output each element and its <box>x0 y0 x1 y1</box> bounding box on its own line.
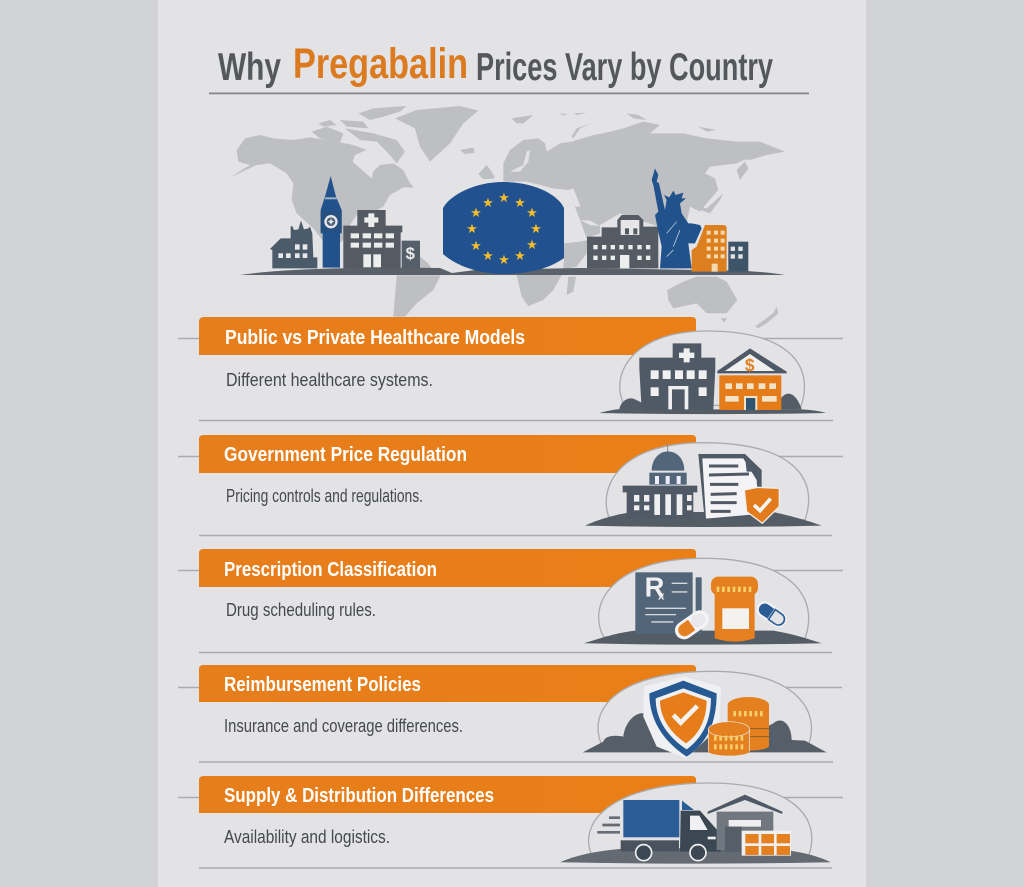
icon: EU flag: ★ <box>498 190 510 205</box>
section 3: prescription classification <box>199 549 822 645</box>
icon: government building <box>587 215 658 268</box>
description: Insurance and coverage differences. <box>224 716 463 736</box>
icon: truck and warehouse <box>560 783 831 864</box>
icon: church <box>270 221 317 268</box>
world map <box>230 106 785 328</box>
icon: hospital <box>343 210 402 268</box>
icon: EU flag: ★ <box>482 248 494 263</box>
section 5: supply and distribution <box>199 776 831 864</box>
ground <box>240 268 785 275</box>
decorative rules <box>178 338 843 868</box>
icon: bank with dollar <box>402 241 420 268</box>
title: Why <box>218 46 281 89</box>
section 2: government regulation <box>199 435 822 527</box>
section 1: public vs private <box>199 317 826 414</box>
heading: Government Price Regulation <box>224 444 467 466</box>
title <box>218 40 773 89</box>
icon: clock tower <box>321 176 342 268</box>
icon: EU flag: ★ <box>470 238 482 253</box>
icon: hospital and bank: $ <box>745 355 755 375</box>
description: Drug scheduling rules. <box>226 600 376 620</box>
panel: central page <box>158 0 866 887</box>
icon: EU flag: ★ <box>498 252 510 267</box>
banner <box>199 317 696 355</box>
icon: shield and coins <box>583 671 827 758</box>
icon: capitol and document <box>585 443 822 527</box>
heading: Supply & Distribution Differences <box>224 785 494 807</box>
banner <box>199 665 696 702</box>
skyline illustration <box>240 168 785 275</box>
title: Prices Vary by Country <box>476 46 773 89</box>
icon: EU flag: ★ <box>514 195 526 210</box>
icon: EU flag: ★ <box>526 237 538 252</box>
description: Availability and logistics. <box>224 827 390 847</box>
section 4: reimbursement policies <box>199 665 827 758</box>
icon: EU flag: ★ <box>482 195 494 210</box>
icon: prescription and bottle: R <box>645 572 665 603</box>
icon: EU flag: ★ <box>514 248 526 263</box>
icon: EU flag <box>443 182 564 274</box>
description: Different healthcare systems. <box>226 370 433 390</box>
icon: hospital and bank <box>599 331 826 414</box>
icon: EU flag: ★ <box>466 221 478 236</box>
banner <box>199 435 696 473</box>
icon: EU flag: ★ <box>530 221 542 236</box>
banner <box>199 776 696 813</box>
icon: small building <box>728 242 748 272</box>
title: Pregabalin <box>293 40 468 88</box>
icon: orange tower <box>692 225 727 272</box>
icon: EU flag: ★ <box>526 205 538 220</box>
heading: Reimbursement Policies <box>224 674 421 696</box>
heading: Prescription Classification <box>224 559 437 581</box>
icon: prescription and bottle <box>584 558 822 645</box>
icon: statue of liberty <box>652 168 702 268</box>
banner <box>199 549 696 587</box>
icon: bank with dollar: $ <box>406 244 416 263</box>
icon: prescription and bottle: x <box>658 590 665 602</box>
description: Pricing controls and regulations. <box>226 486 423 506</box>
icon: EU flag: ★ <box>470 205 482 220</box>
heading: Public vs Private Healthcare Models <box>225 327 525 349</box>
